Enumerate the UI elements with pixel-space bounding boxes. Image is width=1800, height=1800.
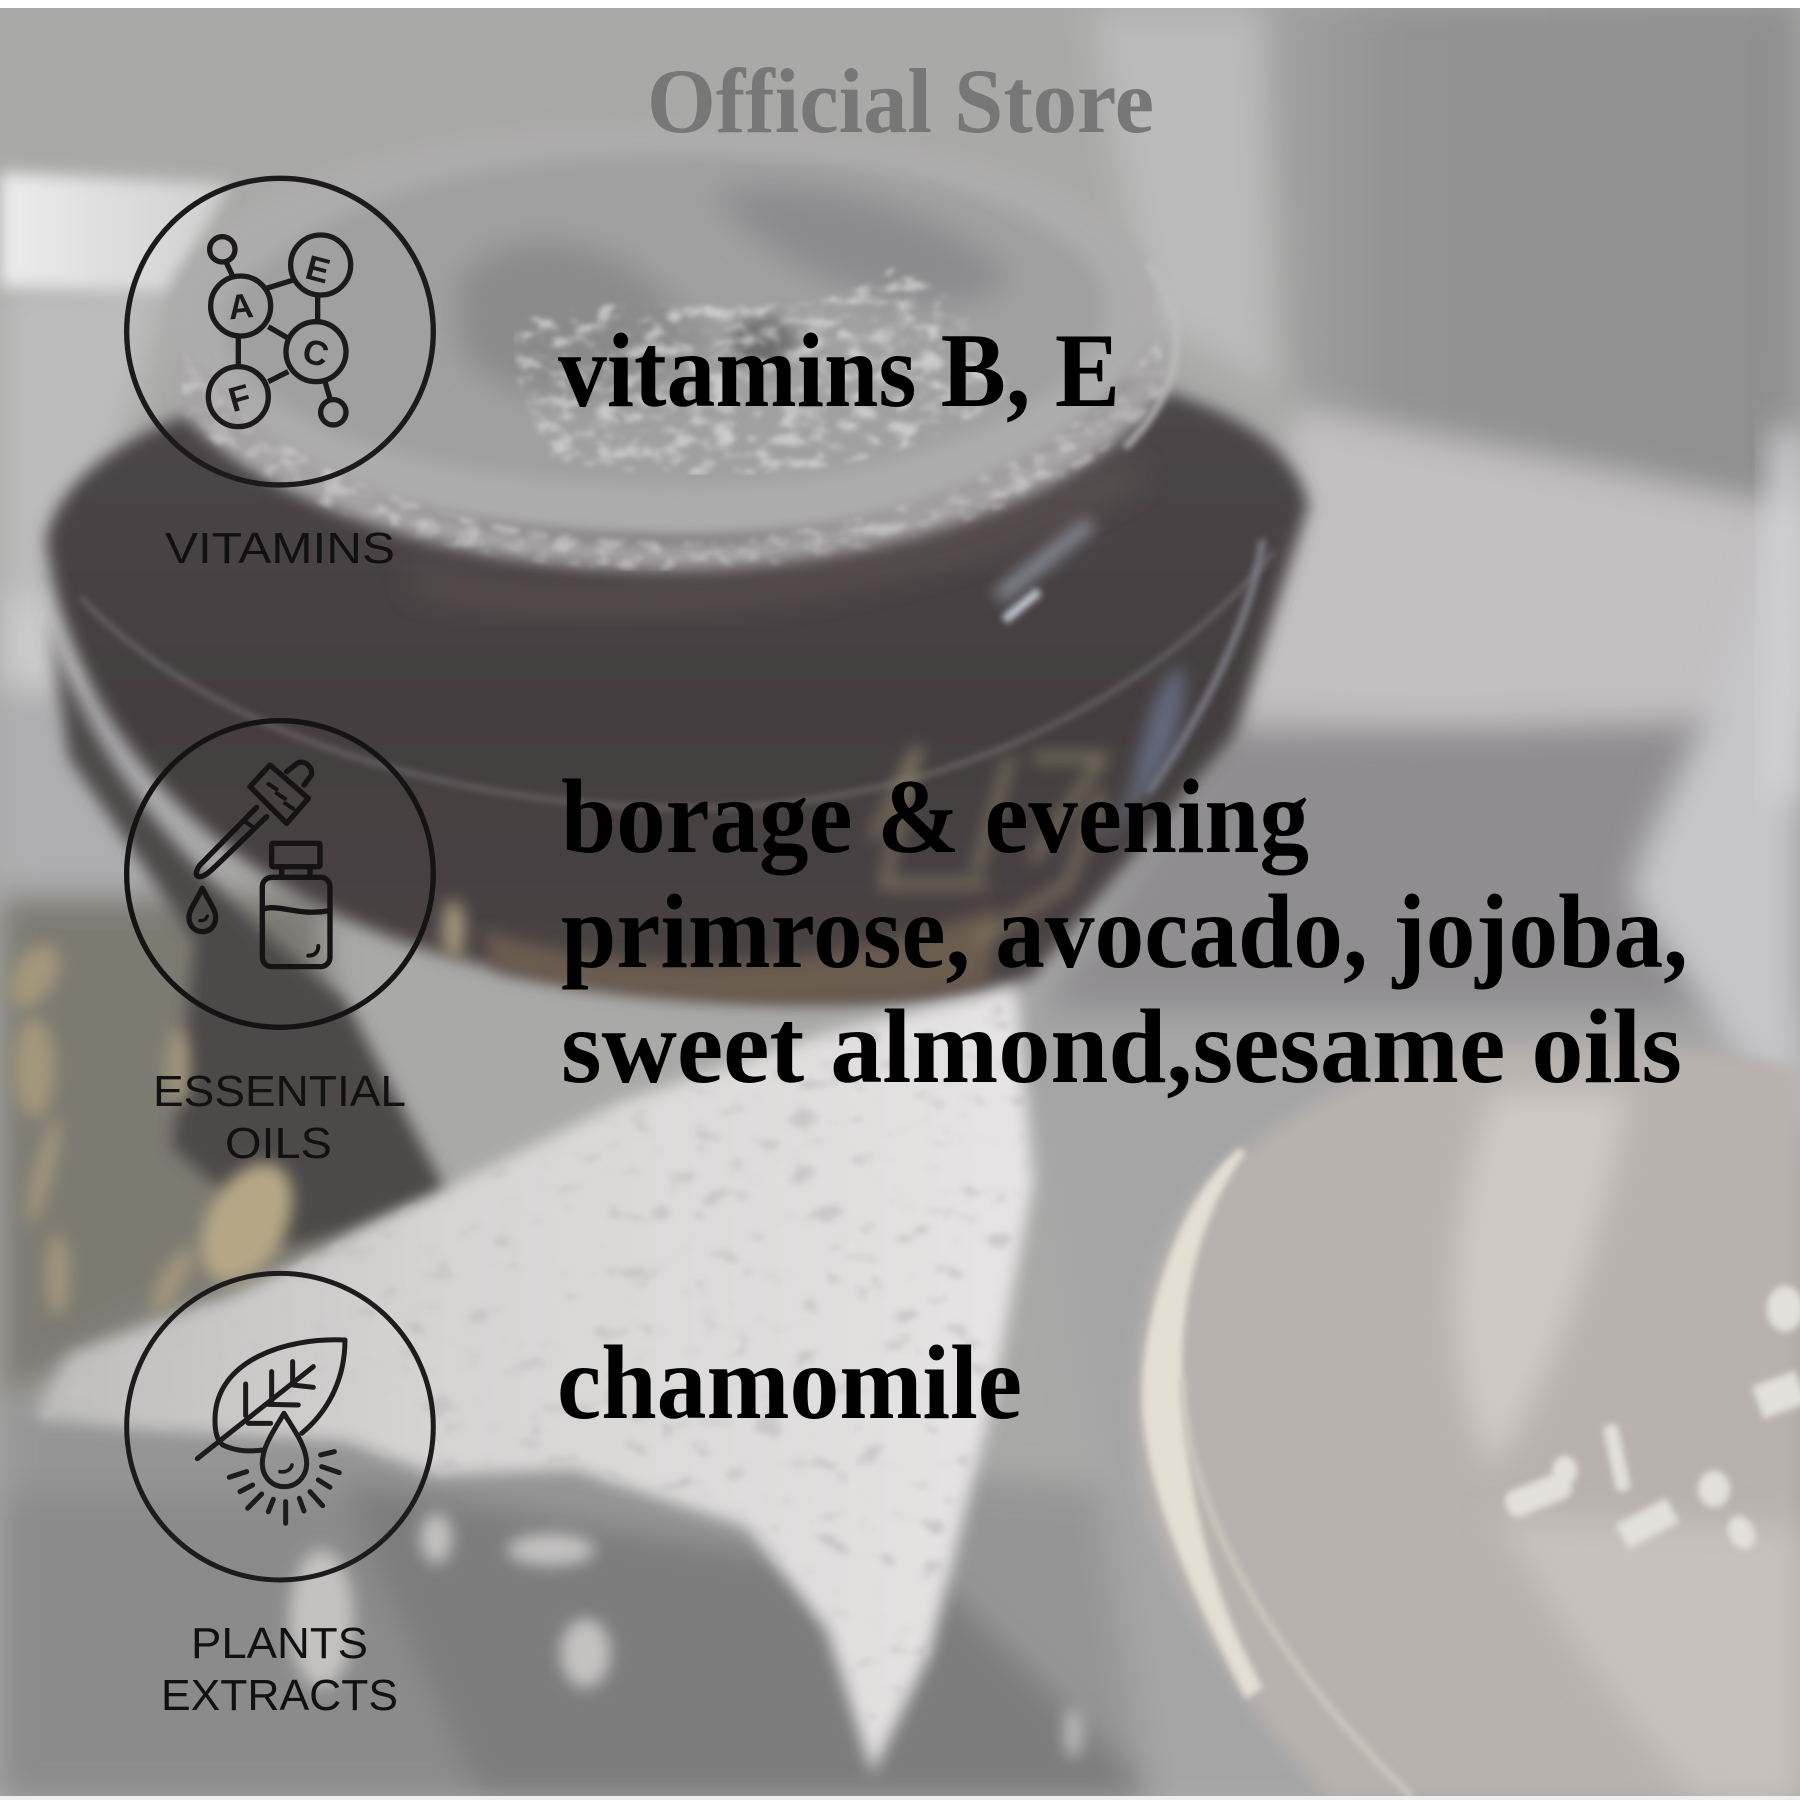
icon: vitamins molecule in circle: F: [225, 378, 255, 420]
label: VITAMINS: VITAMINS: [165, 524, 395, 573]
icon: vitamins molecule in circle: [127, 178, 433, 485]
text: oils list: primrose, avocado, jojoba,: [561, 873, 1688, 990]
white stone: [34, 987, 1033, 1774]
lower jar body: [40, 563, 448, 1246]
label: PLANTS EXTRACTS: PLANTS: [191, 1619, 368, 1668]
text: vitamins list: vitamins B, E: [558, 312, 1120, 429]
jar lip highlight streaks: [999, 522, 1091, 597]
label: ESSENTIAL OILS: [153, 1067, 406, 1168]
text: oils list: [561, 758, 1688, 1105]
label: ESSENTIAL OILS: ESSENTIAL: [153, 1067, 406, 1116]
icon: vitamins molecule in circle: E: [302, 249, 334, 291]
gold jewellery: [0, 900, 465, 1318]
open jar glass and powder: [166, 126, 1155, 540]
icon: vitamins molecule in circle: A: [226, 287, 255, 328]
label: PLANTS EXTRACTS: [161, 1619, 398, 1720]
icon: vitamins molecule in circle: C: [298, 332, 332, 375]
heading: Official Store: Official Store: [647, 50, 1154, 152]
text: oils list: sweet almond,sesame oils: [561, 988, 1682, 1105]
label: ESSENTIAL OILS: OILS: [225, 1119, 332, 1168]
icon: leaf with drop in circle: [127, 1273, 433, 1580]
icon: dropper and oil bottle in circle: [127, 721, 433, 1027]
text: plant extract: chamomile: [557, 1324, 1022, 1441]
metal lid at lower right: [1135, 1043, 1800, 1800]
label: PLANTS EXTRACTS: EXTRACTS: [161, 1671, 398, 1720]
text: oils list: borage & evening: [561, 758, 1309, 875]
product logo on jar: [872, 746, 1102, 941]
